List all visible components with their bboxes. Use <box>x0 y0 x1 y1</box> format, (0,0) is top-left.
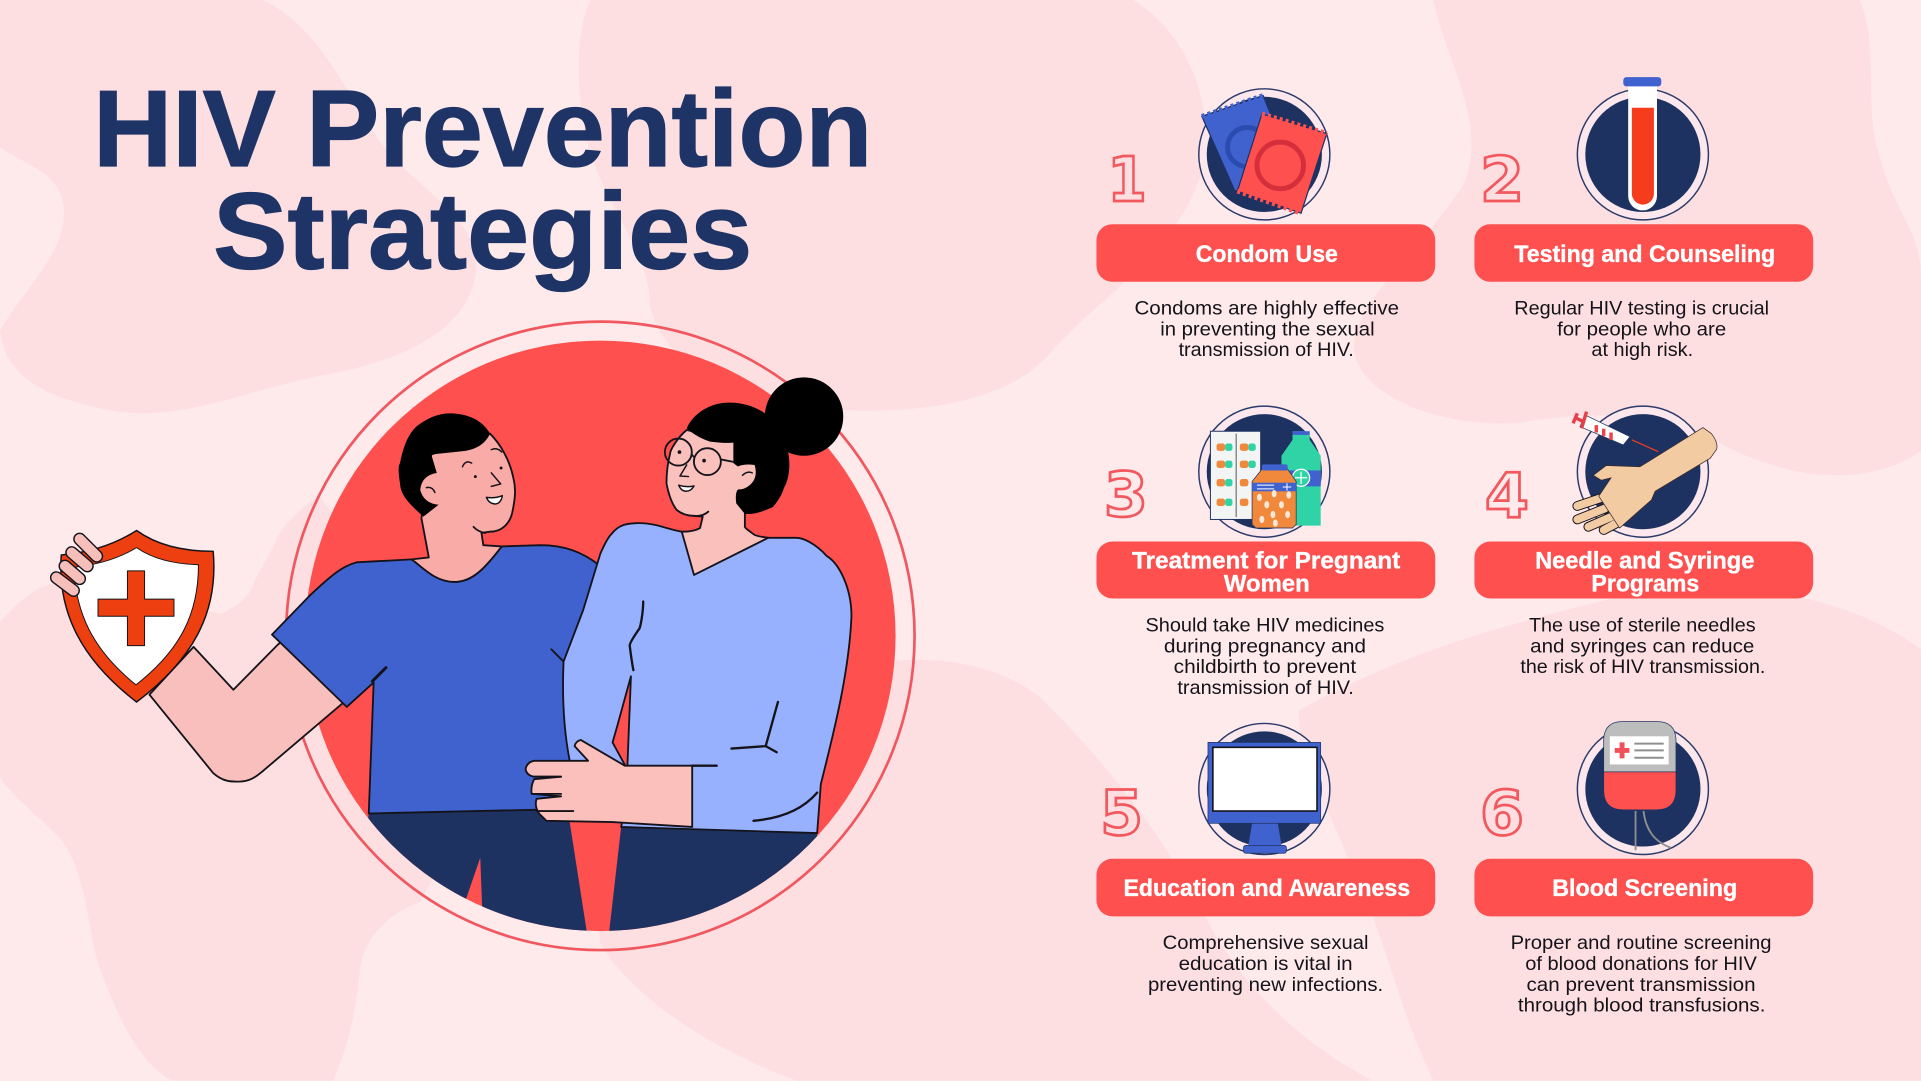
strategy 6: blood screening <box>1474 722 1813 1017</box>
number 6: 6 <box>1480 778 1524 849</box>
face details <box>680 465 689 477</box>
ear <box>420 473 439 505</box>
description <box>1514 298 1769 361</box>
title bar: Treatment for Pregnant <box>1132 547 1400 574</box>
description: childbirth to prevent <box>1174 657 1357 678</box>
sweater <box>563 523 851 833</box>
icon: syringe and arm <box>1573 406 1717 537</box>
title bar: Women <box>1224 571 1310 598</box>
title bar: Blood Screening <box>1552 875 1737 902</box>
description: can prevent transmission <box>1527 975 1756 996</box>
number 3: 3 <box>1104 460 1148 531</box>
strategy 2: testing and counseling <box>1474 77 1813 361</box>
outer ring and red circle <box>286 322 915 950</box>
title bar <box>1096 859 1435 916</box>
gap between arm and torso <box>613 676 631 769</box>
title: HIV Prevention <box>93 68 872 190</box>
title bar: Education and Awareness <box>1123 875 1410 902</box>
man <box>149 413 600 956</box>
number 4: 4 <box>1485 461 1529 532</box>
title bar <box>1096 542 1435 598</box>
description <box>1148 933 1383 996</box>
title bar: Programs <box>1591 571 1699 598</box>
face details <box>462 449 502 486</box>
shirt <box>272 545 600 813</box>
neck and face <box>666 430 768 575</box>
raised arm <box>149 637 345 782</box>
sweater lines <box>630 602 817 821</box>
description: for people who are <box>1557 319 1726 340</box>
description: through blood transfusions. <box>1518 996 1765 1017</box>
icon: condom packets <box>1199 89 1330 220</box>
description <box>1145 616 1384 699</box>
icon: medicines <box>1199 406 1330 537</box>
description: transmission of HIV. <box>1179 340 1354 361</box>
description: Should take HIV medicines <box>1145 616 1384 637</box>
title bar <box>1474 859 1813 916</box>
woman <box>526 377 851 956</box>
title bar <box>1474 224 1813 282</box>
description <box>1511 933 1772 1017</box>
hair and bun <box>687 403 789 514</box>
icon: test tube <box>1577 77 1708 220</box>
strategy 5: education and awareness <box>1096 723 1435 996</box>
title bar <box>1474 542 1813 598</box>
title bar: Condom Use <box>1196 241 1338 268</box>
description <box>1134 298 1399 361</box>
trousers <box>609 828 818 931</box>
description: Condoms are highly effective <box>1134 298 1399 319</box>
icon: blood bag <box>1577 722 1708 855</box>
number 2: 2 <box>1480 145 1524 216</box>
description: education is vital in <box>1179 954 1353 975</box>
description: of blood donations for HIV <box>1525 954 1757 975</box>
description: and syringes can reduce <box>1530 636 1754 657</box>
number 5: 5 <box>1100 778 1143 849</box>
description: Comprehensive sexual <box>1163 933 1368 954</box>
title: Strategies <box>213 170 752 292</box>
title bar: Needle and Syringe <box>1535 547 1754 574</box>
ear <box>735 464 756 489</box>
neck and face <box>412 434 515 582</box>
title bar <box>1096 224 1435 282</box>
strategy 1: condom use <box>1096 89 1435 361</box>
fingers <box>1577 498 1617 530</box>
description: in preventing the sexual <box>1160 319 1375 340</box>
description: the risk of HIV transmission. <box>1520 657 1765 678</box>
number 1: 1 <box>1108 145 1147 216</box>
glasses <box>665 439 733 475</box>
hair <box>399 413 490 517</box>
description <box>1520 616 1765 678</box>
description: during pregnancy and <box>1164 636 1366 657</box>
description: transmission of HIV. <box>1177 678 1354 699</box>
strategy 4: needle and syringe programs <box>1474 406 1813 678</box>
description: preventing new infections. <box>1148 975 1383 996</box>
strategy 3: treatment for pregnant women <box>1096 406 1435 699</box>
illustration: couple with shield <box>56 322 915 956</box>
title <box>93 68 872 292</box>
shield icon <box>56 530 214 702</box>
description: The use of sterile needles <box>1529 616 1756 637</box>
description: Regular HIV testing is crucial <box>1514 298 1769 319</box>
icon: computer monitor <box>1199 723 1330 855</box>
description: Proper and routine screening <box>1511 933 1772 954</box>
trousers <box>368 810 587 931</box>
fingers <box>56 539 97 591</box>
description: at high risk. <box>1591 340 1693 361</box>
hand on partner <box>526 740 692 827</box>
title bar: Testing and Counseling <box>1514 241 1775 268</box>
